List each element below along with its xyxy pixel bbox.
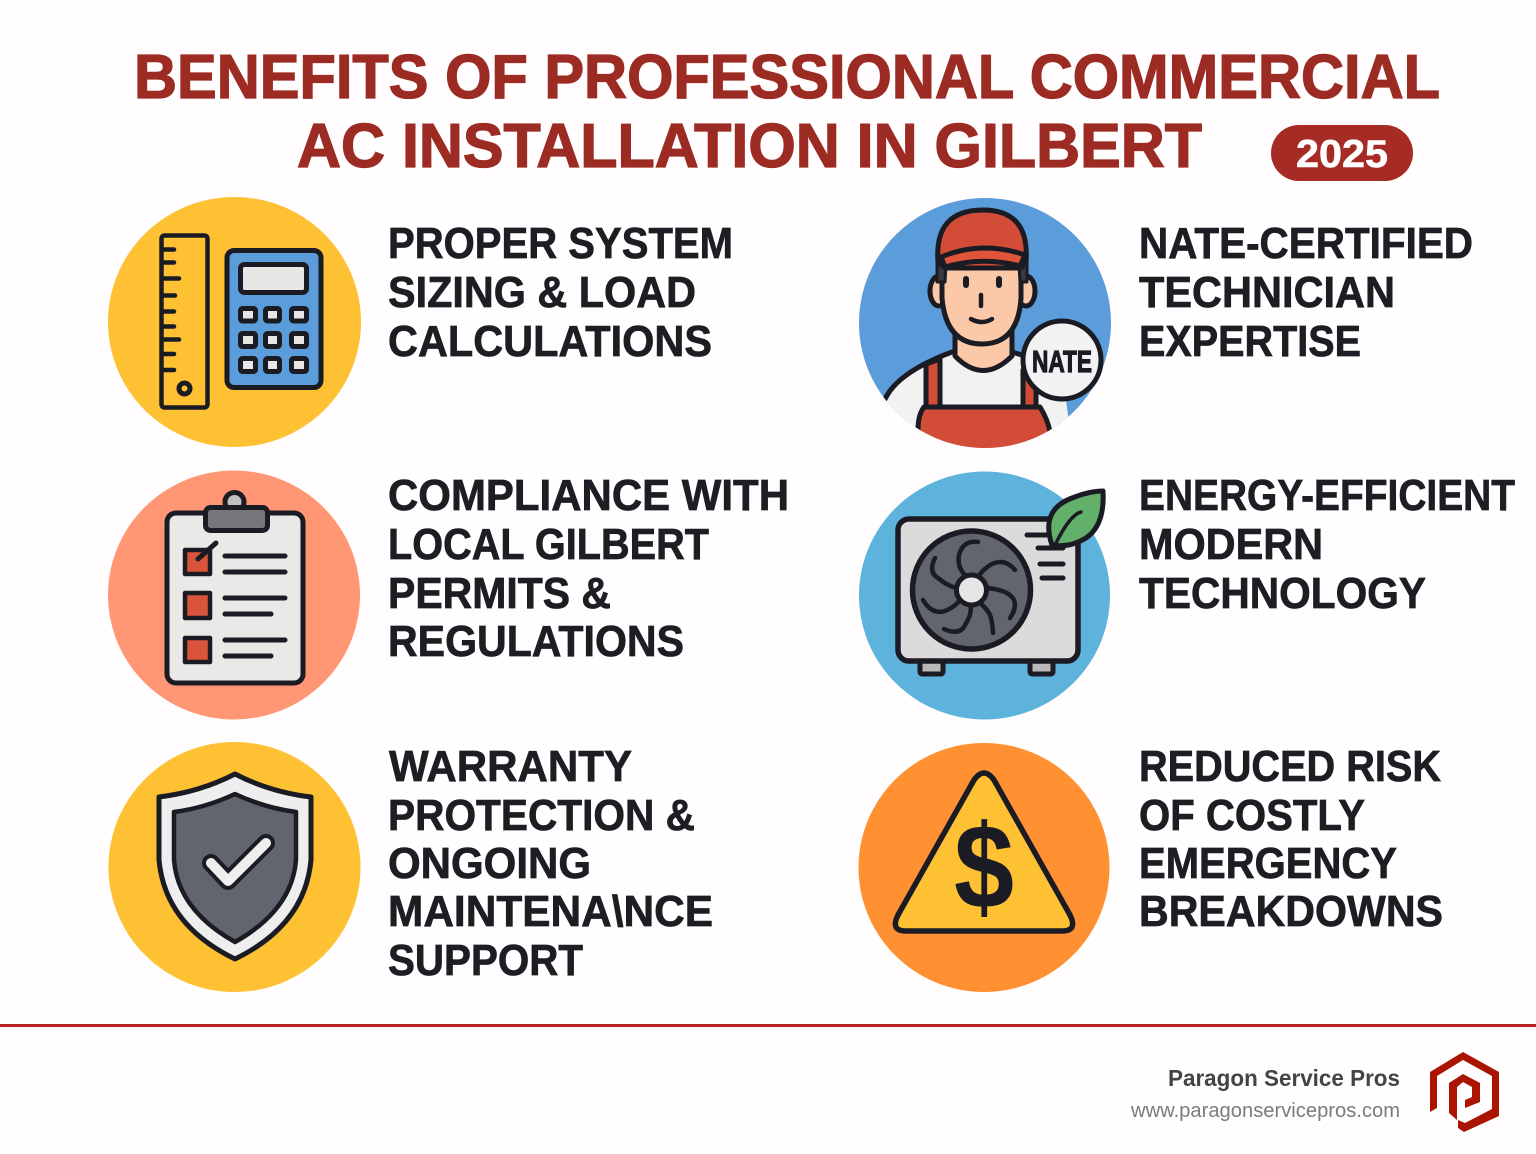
title: AC INSTALLATION IN GILBERT — [297, 112, 1202, 181]
panel: NATE-certified technician — [859, 198, 1473, 460]
panel: warranty protection — [108, 742, 713, 992]
text: warranty protection: SUPPORT — [388, 936, 583, 985]
text: compliance: LOCAL GILBERT — [388, 520, 709, 569]
text: compliance: COMPLIANCE WITH — [388, 471, 789, 520]
icon: ruler and calculator — [108, 197, 361, 447]
icon: shield with check mark — [108, 742, 360, 992]
text: NATE-certified technician: NATE-CERTIFIED — [1139, 219, 1473, 268]
text: NATE-certified technician: EXPERTISE — [1139, 317, 1361, 366]
text: reduced risk: REDUCED RISK — [1139, 742, 1441, 791]
text: warranty protection: PROTECTION & — [388, 791, 695, 840]
panel: proper system sizing — [108, 197, 733, 447]
text: reduced risk: OF COSTLY — [1139, 791, 1365, 840]
title — [134, 43, 1440, 181]
text: energy-efficient technology: MODERN — [1139, 520, 1323, 569]
text: proper system sizing: CALCULATIONS — [388, 317, 712, 366]
icon: warning triangle with dollar sign: $ — [954, 800, 1014, 934]
text: reduced risk: BREAKDOWNS — [1139, 887, 1443, 936]
year badge — [1271, 125, 1413, 181]
text: warranty protection — [388, 742, 713, 985]
panel: reduced risk — [858, 742, 1443, 992]
text: reduced risk: EMERGENCY — [1139, 839, 1397, 888]
icon: clipboard checklist — [108, 470, 360, 720]
footer company name and URL: Paragon Service Pros — [1168, 1065, 1400, 1091]
text: proper system sizing: PROPER SYSTEM — [388, 219, 733, 268]
text: proper system sizing — [388, 219, 733, 366]
text: energy-efficient technology — [1139, 471, 1515, 618]
text: compliance — [388, 471, 789, 666]
logo — [1430, 1052, 1499, 1132]
text: reduced risk — [1139, 742, 1443, 936]
icon: technician with NATE badge: NATE — [1032, 344, 1092, 379]
panel: energy-efficient technology — [859, 471, 1515, 720]
text: warranty protection: WARRANTY — [389, 742, 632, 791]
text: warranty protection: ONGOING — [388, 839, 591, 888]
text: compliance: PERMITS & — [388, 569, 611, 618]
icon: warning triangle with dollar sign — [858, 743, 1110, 992]
text: warranty protection: MAINTENA\NCE — [388, 887, 713, 936]
footer company name and URL: www.paragonservicepros.com — [1130, 1100, 1400, 1122]
icon: AC condenser with leaf — [859, 472, 1110, 720]
text: energy-efficient technology: TECHNOLOGY — [1139, 569, 1426, 618]
text: NATE-certified technician — [1139, 219, 1473, 366]
year badge: 2025 — [1296, 133, 1388, 176]
text: NATE-certified technician: TECHNICIAN — [1139, 268, 1395, 317]
text: compliance: REGULATIONS — [388, 617, 684, 666]
footer company name and URL — [1130, 1065, 1400, 1122]
title: BENEFITS OF PROFESSIONAL COMMERCIAL — [134, 43, 1440, 112]
icon: technician with NATE badge — [859, 198, 1111, 460]
text: proper system sizing: SIZING & LOAD — [388, 268, 696, 317]
panel: compliance — [108, 470, 789, 720]
